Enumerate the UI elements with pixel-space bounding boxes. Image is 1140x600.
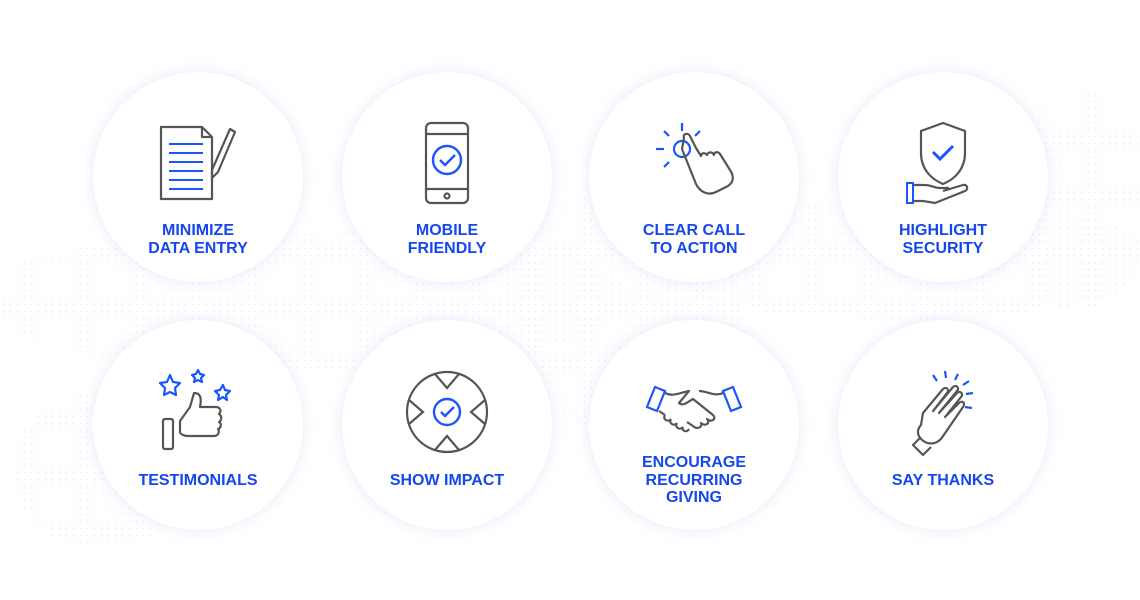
panel: encourage recurring giving — [589, 320, 799, 530]
label: DATA ENTRY — [148, 240, 248, 256]
label — [899, 222, 987, 256]
panel: clear call to action — [589, 72, 799, 282]
panel: say thanks — [838, 320, 1048, 530]
panel: minimize data entry — [93, 72, 303, 282]
icon: phone with check — [424, 122, 470, 204]
label: TO ACTION — [650, 240, 738, 256]
label: RECURRING — [646, 472, 742, 488]
label: HIGHLIGHT — [899, 222, 987, 239]
label: SHOW IMPACT — [390, 472, 504, 489]
label — [148, 222, 248, 256]
icon: arrows around check — [406, 370, 488, 454]
label: SECURITY — [903, 240, 983, 256]
label: CLEAR CALL — [643, 222, 745, 239]
panel: highlight security — [838, 72, 1048, 282]
label: TESTIMONIALS — [138, 472, 258, 489]
icon: tapping hand — [656, 123, 734, 195]
label — [643, 222, 745, 256]
icon: clapping hands — [912, 370, 974, 456]
panel: testimonials — [93, 320, 303, 530]
icon: document with pen — [160, 126, 236, 200]
label: FRIENDLY — [408, 240, 486, 256]
label: MOBILE — [416, 222, 478, 239]
icon: shield on hand — [906, 122, 968, 204]
label — [408, 222, 486, 256]
panel: show impact — [342, 320, 552, 530]
icon: thumbs up with stars — [158, 368, 232, 450]
label — [642, 454, 746, 506]
label: SAY THANKS — [892, 472, 994, 489]
label: MINIMIZE — [162, 222, 234, 239]
label: GIVING — [666, 489, 722, 506]
label: ENCOURAGE — [642, 454, 746, 471]
icon: handshake — [646, 386, 742, 432]
panel: mobile friendly — [342, 72, 552, 282]
